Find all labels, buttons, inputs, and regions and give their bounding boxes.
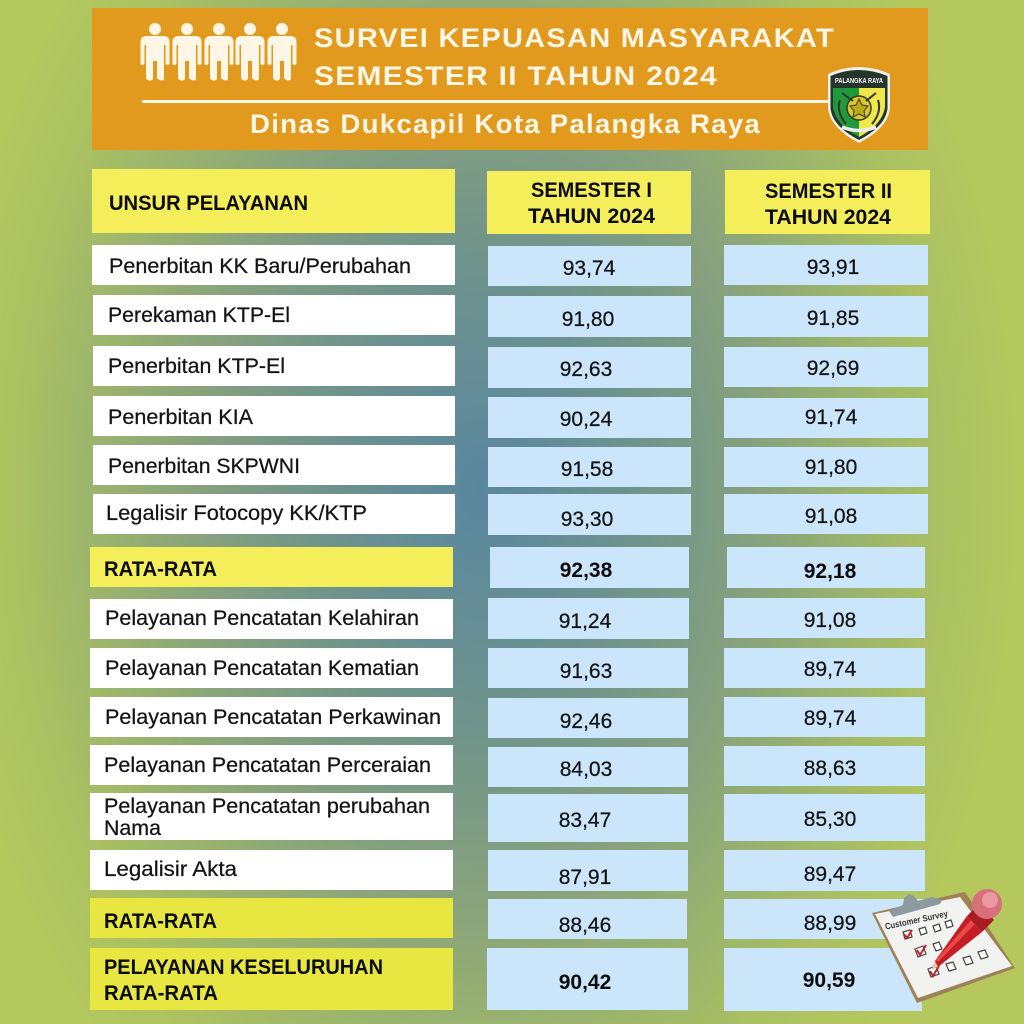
row: Pelayanan Pencatatan Kematian: [90, 648, 925, 688]
row: rata-rata 2: 88,46: [559, 914, 611, 937]
row: Pelayanan Pencatatan perubahan Nama: Pelayanan Pencatatan perubahan: [104, 795, 430, 818]
table header: semester I: SEMESTER I: [531, 179, 652, 202]
row: Pelayanan Pencatatan perubahan Nama: Nama: [104, 817, 161, 840]
row: Perekaman KTP-El: Perekaman KTP-El: [108, 304, 290, 327]
row: Penerbitan KTP-El: Penerbitan KTP-El: [108, 355, 285, 378]
row: pelayanan keseluruhan rata-rata: PELAYANAN KESELURUHAN: [104, 956, 383, 979]
table header: unsur pelayanan: UNSUR PELAYANAN: [109, 192, 308, 215]
table header: semester I: [487, 171, 691, 234]
row: Pelayanan Pencatatan Kelahiran: 91,24: [559, 610, 612, 633]
row: pelayanan keseluruhan rata-rata: 90,42: [559, 971, 611, 994]
row: Pelayanan Pencatatan Kelahiran: [90, 598, 925, 639]
row: Pelayanan Pencatatan Perceraian: Pelayanan Pencatatan Perceraian: [104, 754, 431, 777]
title line 2: SEMESTER II TAHUN 2024: [314, 61, 718, 91]
icon: customer survey clipboard with pencil: [872, 889, 1015, 1003]
header banner: [92, 8, 928, 150]
row: Perekaman KTP-El: 91,85: [807, 307, 859, 330]
clipboard clip: [889, 894, 942, 917]
row: Penerbitan KIA: 91,74: [805, 406, 858, 429]
row: Penerbitan KIA: Penerbitan KIA: [108, 406, 253, 429]
row: Penerbitan SKPWNI: 91,58: [561, 458, 613, 481]
row: Legalisir Fotocopy KK/KTP: 93,30: [561, 508, 613, 531]
row: Penerbitan KK Baru/Perubahan: Penerbitan KK Baru/Perubahan: [109, 255, 411, 278]
row: Pelayanan Pencatatan Kelahiran: Pelayanan Pencatatan Kelahiran: [105, 607, 419, 630]
row: Pelayanan Pencatatan Kematian: 91,63: [560, 660, 612, 683]
row: rata-rata 2: RATA-RATA: [104, 910, 217, 933]
row: Penerbitan KK Baru/Perubahan: 93,74: [563, 257, 616, 280]
row: Pelayanan Pencatatan Perceraian: 84,03: [560, 758, 612, 781]
row: Perekaman KTP-El: [93, 295, 928, 337]
table header: semester II: TAHUN 2024: [765, 206, 891, 229]
row: Pelayanan Pencatatan Perkawinan: [90, 697, 925, 738]
row: rata-rata 1: 92,38: [560, 559, 613, 582]
row: Pelayanan Pencatatan perubahan Nama: 85,30: [804, 808, 856, 831]
row: pelayanan keseluruhan rata-rata: RATA-RATA: [104, 982, 218, 1005]
row: pelayanan keseluruhan rata-rata: 90,59: [803, 969, 855, 992]
row: Penerbitan KIA: [93, 396, 928, 438]
survey checkboxes: [903, 920, 988, 977]
row: Pelayanan Pencatatan Perceraian: 88,63: [804, 757, 856, 780]
title line 1: SURVEI KEPUASAN MASYARAKAT: [314, 23, 835, 53]
row: Penerbitan KIA: 90,24: [560, 408, 613, 431]
row: Pelayanan Pencatatan Perkawinan: 89,74: [804, 707, 857, 730]
row: Legalisir Akta: Legalisir Akta: [104, 858, 237, 881]
icon: Palangka Raya crest: [828, 67, 890, 143]
icon: group of people: [140, 23, 296, 80]
row: Perekaman KTP-El: 91,80: [562, 308, 614, 331]
row: rata-rata 1: [90, 547, 925, 588]
clipboard board: [872, 892, 1015, 1003]
row: Pelayanan Pencatatan perubahan Nama: [90, 793, 925, 842]
survey heading: Customer Survey: [884, 909, 949, 932]
row: Pelayanan Pencatatan Kematian: Pelayanan Pencatatan Kematian: [105, 657, 419, 680]
row: Penerbitan SKPWNI: 91,80: [805, 456, 857, 479]
table header: semester II: [725, 170, 930, 234]
row: Legalisir Fotocopy KK/KTP: 91,08: [805, 505, 857, 528]
row: Penerbitan KK Baru/Perubahan: 93,91: [807, 256, 859, 279]
row: Pelayanan Pencatatan Perceraian: [90, 745, 925, 787]
row: Penerbitan SKPWNI: Penerbitan SKPWNI: [108, 455, 300, 478]
row: Legalisir Akta: 87,91: [559, 866, 611, 889]
row: Penerbitan KK Baru/Perubahan: [92, 245, 928, 286]
row: Pelayanan Pencatatan Perkawinan: Pelayanan Pencatatan Perkawinan: [105, 706, 441, 729]
row: Penerbitan KTP-El: 92,63: [560, 358, 612, 381]
table header: semester I: TAHUN 2024: [528, 205, 655, 228]
row: Penerbitan KTP-El: 92,69: [807, 357, 859, 380]
row: rata-rata 2: [90, 898, 924, 939]
pencil: [932, 889, 1002, 969]
row: Legalisir Akta: 89,47: [804, 863, 856, 886]
row: Pelayanan Pencatatan Kelahiran: 91,08: [804, 609, 856, 632]
row: Legalisir Fotocopy KK/KTP: Legalisir Fotocopy KK/KTP: [106, 502, 367, 525]
red check marks: [904, 930, 939, 976]
row: rata-rata 1: 92,18: [804, 560, 857, 583]
survey paper: [875, 897, 1012, 998]
row: rata-rata 2: 88,99: [804, 912, 856, 935]
row: Legalisir Fotocopy KK/KTP: [93, 494, 928, 535]
row: Pelayanan Pencatatan Perkawinan: 92,46: [560, 710, 612, 733]
table header: semester II: SEMESTER II: [765, 180, 892, 203]
row: Pelayanan Pencatatan perubahan Nama: 83,47: [559, 809, 611, 832]
row: Penerbitan KTP-El: [93, 346, 928, 388]
row: rata-rata 1: RATA-RATA: [104, 558, 217, 581]
subtitle: Dinas Dukcapil Kota Palangka Raya: [250, 109, 761, 139]
row: Legalisir Akta: [90, 850, 925, 891]
table header: unsur pelayanan: [92, 169, 455, 233]
row: Pelayanan Pencatatan Kematian: 89,74: [804, 658, 857, 681]
icon: Palangka Raya crest: PALANGKA RAYA: [835, 78, 883, 85]
row: pelayanan keseluruhan rata-rata: [90, 948, 922, 1011]
row: Penerbitan SKPWNI: [93, 445, 928, 487]
